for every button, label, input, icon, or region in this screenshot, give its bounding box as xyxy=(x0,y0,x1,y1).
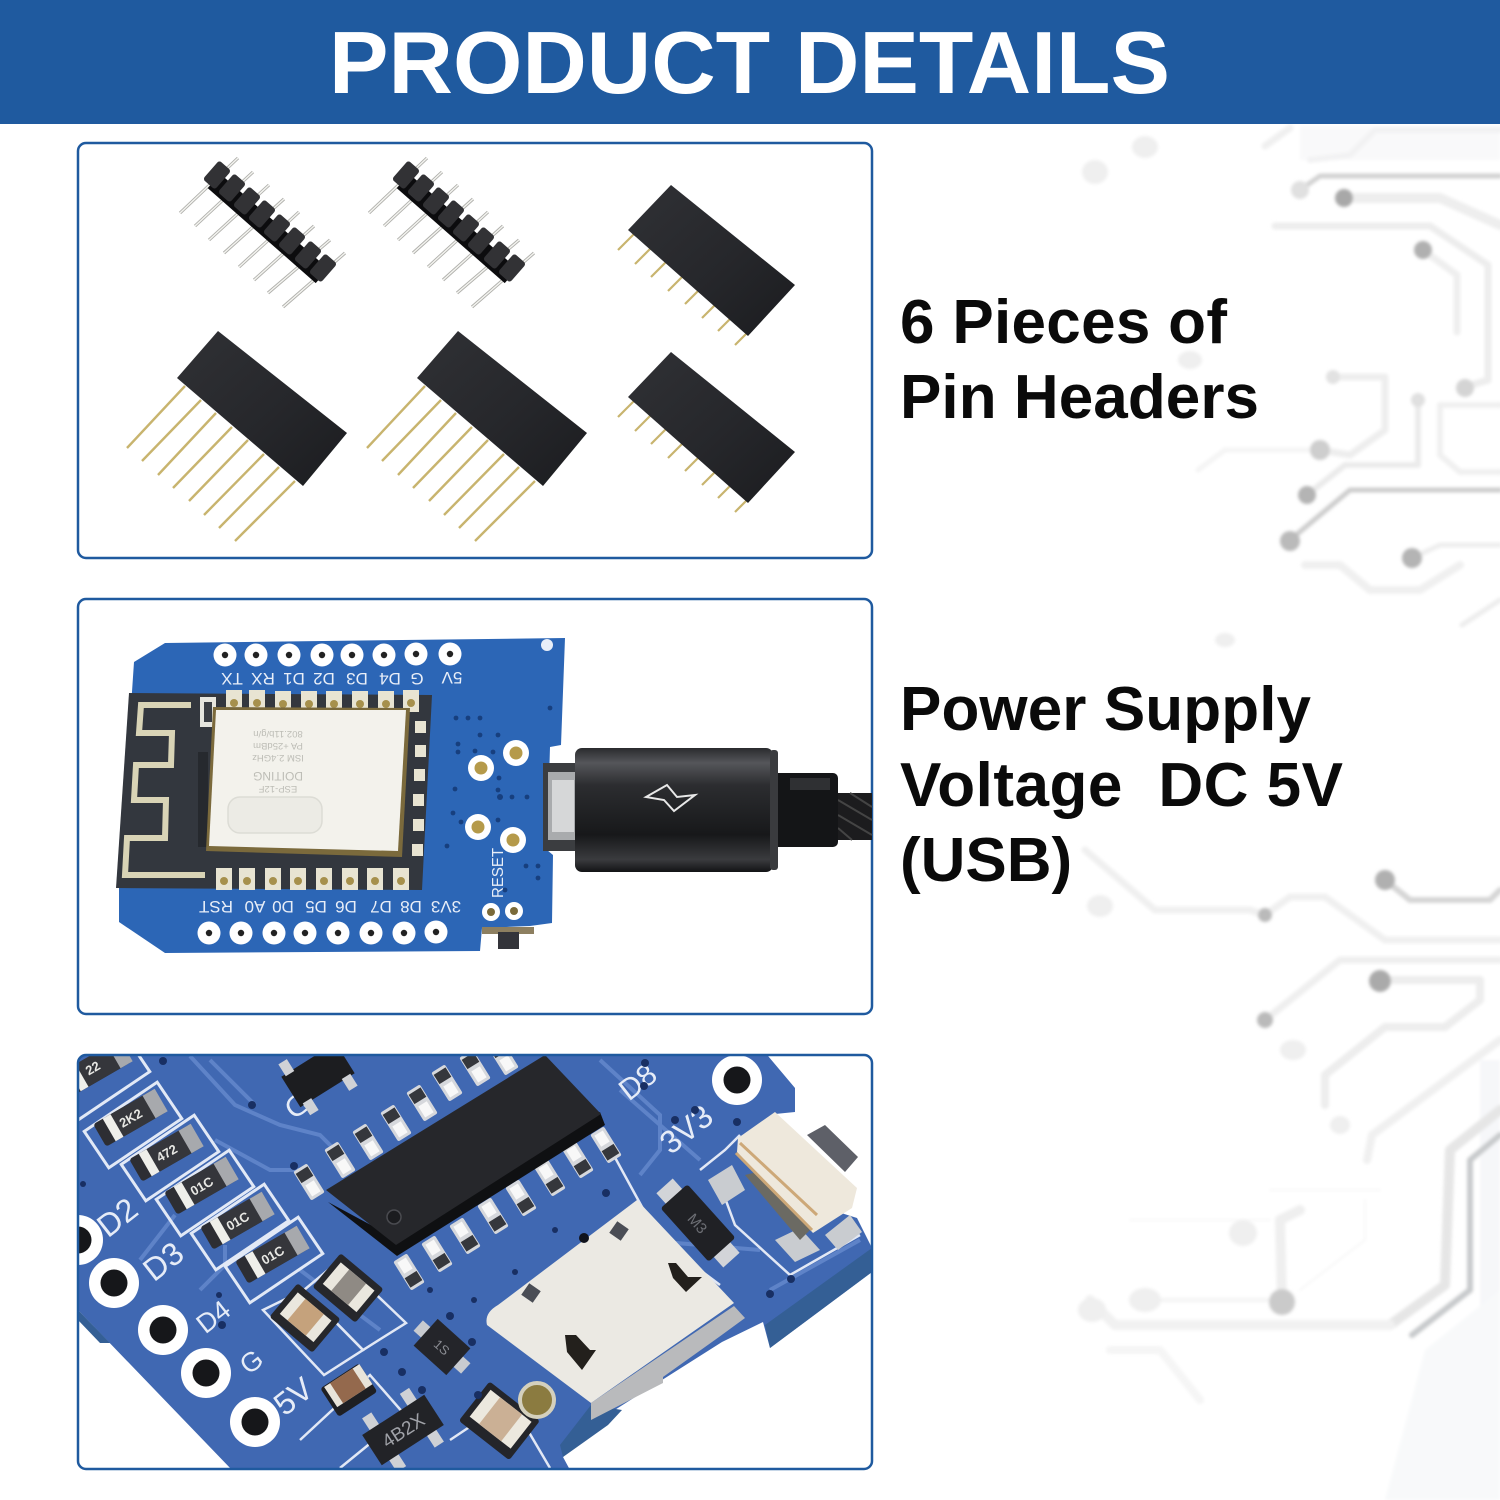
shield logo xyxy=(228,797,322,833)
background: faint circuit traces xyxy=(1078,126,1500,1500)
top pin labels xyxy=(221,668,462,688)
bottom pin labels xyxy=(199,897,461,916)
IC legs xyxy=(293,1038,622,1291)
resistor codes: 01C xyxy=(259,1242,287,1268)
capacitor brown xyxy=(320,1363,377,1417)
diode near connector xyxy=(656,1178,740,1268)
top pin labels: G xyxy=(410,669,424,688)
top pin labels: D4 xyxy=(379,669,401,688)
silkscreen pin labels: D xyxy=(277,1086,315,1125)
capacitor bottom xyxy=(459,1381,540,1460)
male pin header 1 xyxy=(180,158,345,307)
bottom pin labels: D6 xyxy=(335,897,357,916)
silkscreen pin labels: 3V3 xyxy=(653,1098,720,1161)
top pin holes xyxy=(214,642,462,666)
bottom pin holes xyxy=(198,920,448,944)
ESP-12F shield xyxy=(206,707,410,857)
LED xyxy=(200,697,216,727)
reset holes xyxy=(482,902,523,921)
silkscreen outlines xyxy=(263,1130,860,1468)
capacitor left xyxy=(269,1283,341,1353)
bottom pin labels: D8 xyxy=(400,897,422,916)
bottom pin labels: 3V3 xyxy=(431,897,461,916)
male pin header 2 xyxy=(369,158,534,307)
silkscreen pin labels: D4 xyxy=(191,1294,236,1339)
switch lower body xyxy=(745,1172,810,1240)
silkscreen pin labels: D8 xyxy=(613,1058,663,1107)
micro USB metal plug xyxy=(543,763,579,851)
corner mark xyxy=(541,639,553,651)
switch tan stripes xyxy=(736,1143,817,1230)
panel: board with USB cable xyxy=(78,599,872,1014)
top pin labels: 5V xyxy=(441,668,462,687)
board edge xyxy=(78,1248,872,1457)
resistor codes: 2K2 xyxy=(117,1106,145,1131)
text: pin headers caption xyxy=(900,288,1259,432)
text: pin headers caption: 6 Pieces of xyxy=(900,288,1227,357)
resistor codes: 01C xyxy=(224,1208,252,1234)
panel: board closeup xyxy=(52,1033,872,1477)
text: power supply caption: Voltage DC 5V xyxy=(900,751,1343,820)
shield markings: PA +25dBm xyxy=(253,740,303,751)
long female header left xyxy=(127,331,347,541)
shield markings xyxy=(252,728,304,794)
USB plug body xyxy=(575,748,778,872)
bottom pin labels: D0 xyxy=(272,897,294,916)
copper traces xyxy=(140,1056,860,1330)
short female header bottom right xyxy=(618,352,795,512)
transistor 4B2X: 4B2X xyxy=(379,1410,429,1453)
resistors xyxy=(79,1056,310,1283)
text: power supply caption: Power Supply xyxy=(900,675,1312,744)
silkscreen pin labels: 5V xyxy=(267,1370,320,1423)
switch pads xyxy=(708,1165,862,1262)
top module pads xyxy=(226,690,419,713)
switch side nub xyxy=(807,1125,858,1172)
silkscreen pin labels: D2 xyxy=(90,1191,144,1244)
silkscreen pin labels xyxy=(90,1058,720,1423)
silkscreen pin labels: D3 xyxy=(136,1235,190,1288)
board vias xyxy=(445,706,552,892)
bottom module pads xyxy=(216,868,409,890)
button xyxy=(482,927,534,949)
diode 1S xyxy=(414,1318,470,1376)
short female header top right xyxy=(618,185,795,345)
switch body xyxy=(737,1112,857,1233)
resistor codes: 22 xyxy=(83,1058,103,1078)
reset label: RESET xyxy=(490,848,507,898)
bottom pin labels: RST xyxy=(199,897,233,916)
top pin labels: RX xyxy=(251,669,275,688)
text: power supply caption xyxy=(900,675,1343,895)
resistor codes xyxy=(83,1058,287,1268)
USB connector xyxy=(486,1200,745,1420)
text: pin headers caption: Pin Headers xyxy=(900,363,1259,432)
transistor 4B2X xyxy=(362,1388,444,1468)
USB cable xyxy=(772,773,872,847)
capacitor right xyxy=(312,1253,384,1323)
gold mounting holes xyxy=(465,740,529,853)
diode near connector: M3 xyxy=(684,1211,710,1237)
shield markings: 802.11b/g/n xyxy=(253,728,303,739)
resistor codes: 472 xyxy=(154,1141,180,1165)
top pin labels: D2 xyxy=(313,669,335,688)
text: power supply caption: (USB) xyxy=(900,826,1072,895)
IC chip xyxy=(326,1055,605,1256)
title: PRODUCT DETAILS xyxy=(329,13,1170,112)
side module pads xyxy=(412,721,426,856)
shield markings: ESP-12F xyxy=(259,783,297,794)
resistor codes: 01C xyxy=(188,1173,216,1199)
gold solder xyxy=(520,1383,554,1417)
top pin labels: D1 xyxy=(283,669,305,688)
ESP module base and antenna xyxy=(116,693,432,890)
bottom pin labels: D5 xyxy=(305,897,327,916)
long female header middle xyxy=(367,331,587,541)
top pin labels: D3 xyxy=(346,669,368,688)
header banner xyxy=(0,0,1500,124)
top pin labels: TX xyxy=(221,669,243,688)
icon: lightning xyxy=(646,785,695,811)
shield markings: DOITING xyxy=(253,769,303,783)
bottom pin labels: A0 xyxy=(245,897,265,916)
panel: pin headers xyxy=(78,143,872,558)
diode 1S: 1S xyxy=(431,1336,453,1358)
tactile switch xyxy=(708,1112,862,1262)
shield markings: ISM 2.4GHz xyxy=(252,752,304,763)
connector tabs xyxy=(521,1221,629,1303)
bottom pin labels: D7 xyxy=(370,897,392,916)
board xyxy=(119,638,565,953)
board surface xyxy=(70,1050,872,1470)
small vias xyxy=(80,1057,795,1399)
silkscreen pin labels: G xyxy=(234,1344,269,1380)
pin holes xyxy=(53,1055,762,1447)
top transistor xyxy=(278,1056,358,1116)
resistor silkscreen boxes xyxy=(79,1056,325,1305)
connector slots xyxy=(565,1263,702,1370)
